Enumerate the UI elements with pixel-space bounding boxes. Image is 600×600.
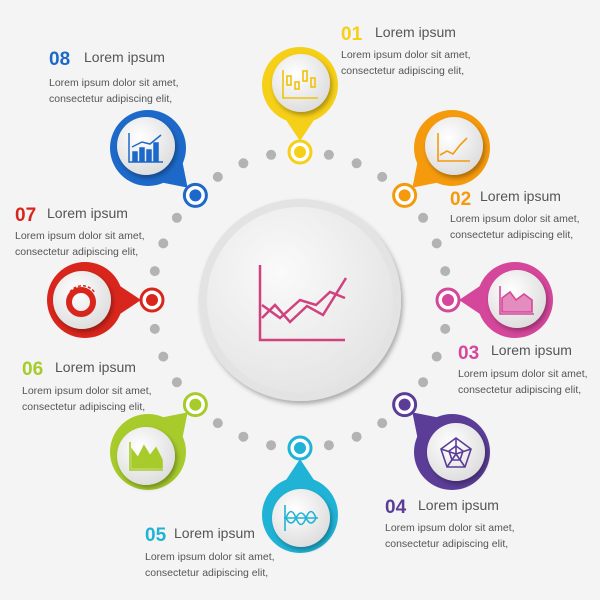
pin 01 — [262, 47, 338, 163]
text 01 — [341, 24, 471, 77]
text 08: Lorem ipsum — [84, 49, 165, 65]
pin 05 — [262, 437, 338, 553]
text 06 — [22, 359, 152, 413]
text 01: consectetur adipiscing elit, — [341, 65, 464, 77]
pin 03 — [437, 262, 553, 338]
text 05 — [145, 525, 275, 579]
text 05: consectetur adipiscing elit, — [145, 567, 268, 579]
pin 06 — [94, 370, 230, 506]
dotted ring — [150, 150, 450, 450]
text 05: Lorem ipsum — [174, 525, 255, 541]
pin 08 — [94, 94, 230, 230]
text 03: consectetur adipiscing elit, — [458, 384, 581, 396]
text 07 — [15, 205, 145, 258]
text 06: 06 — [22, 359, 43, 380]
text 02: Lorem ipsum — [480, 188, 561, 204]
text 05: 05 — [145, 525, 167, 546]
text 08: Lorem ipsum dolor sit amet, — [49, 77, 179, 89]
text 07: Lorem ipsum — [47, 205, 128, 221]
text 04: Lorem ipsum — [418, 497, 499, 513]
text 01: Lorem ipsum dolor sit amet, — [341, 49, 471, 61]
text 08 — [49, 49, 179, 105]
text 02 — [450, 188, 580, 241]
text 06: Lorem ipsum dolor sit amet, — [22, 385, 152, 397]
text 07: 07 — [15, 205, 36, 226]
pin 02 — [370, 94, 506, 230]
text 08: 08 — [49, 49, 70, 70]
text 01: 01 — [341, 24, 363, 45]
text 08: consectetur adipiscing elit, — [49, 93, 172, 105]
text 03: 03 — [458, 343, 479, 364]
text 03: Lorem ipsum — [491, 342, 572, 358]
center circle with chart icon — [199, 199, 401, 401]
text 04: consectetur adipiscing elit, — [385, 538, 508, 550]
pin 07 — [47, 262, 163, 338]
text 06: consectetur adipiscing elit, — [22, 401, 145, 413]
text 03 — [458, 342, 588, 396]
text 05: Lorem ipsum dolor sit amet, — [145, 551, 275, 563]
text 04 — [385, 497, 515, 550]
text 02: 02 — [450, 189, 471, 210]
text 01: Lorem ipsum — [375, 24, 456, 40]
text 04: 04 — [385, 497, 407, 518]
text 07: consectetur adipiscing elit, — [15, 246, 138, 258]
text 02: consectetur adipiscing elit, — [450, 229, 573, 241]
text 03: Lorem ipsum dolor sit amet, — [458, 368, 588, 380]
text 07: Lorem ipsum dolor sit amet, — [15, 230, 145, 242]
pin 04 — [370, 370, 506, 506]
text 06: Lorem ipsum — [55, 359, 136, 375]
text 04: Lorem ipsum dolor sit amet, — [385, 522, 515, 534]
text 02: Lorem ipsum dolor sit amet, — [450, 213, 580, 225]
